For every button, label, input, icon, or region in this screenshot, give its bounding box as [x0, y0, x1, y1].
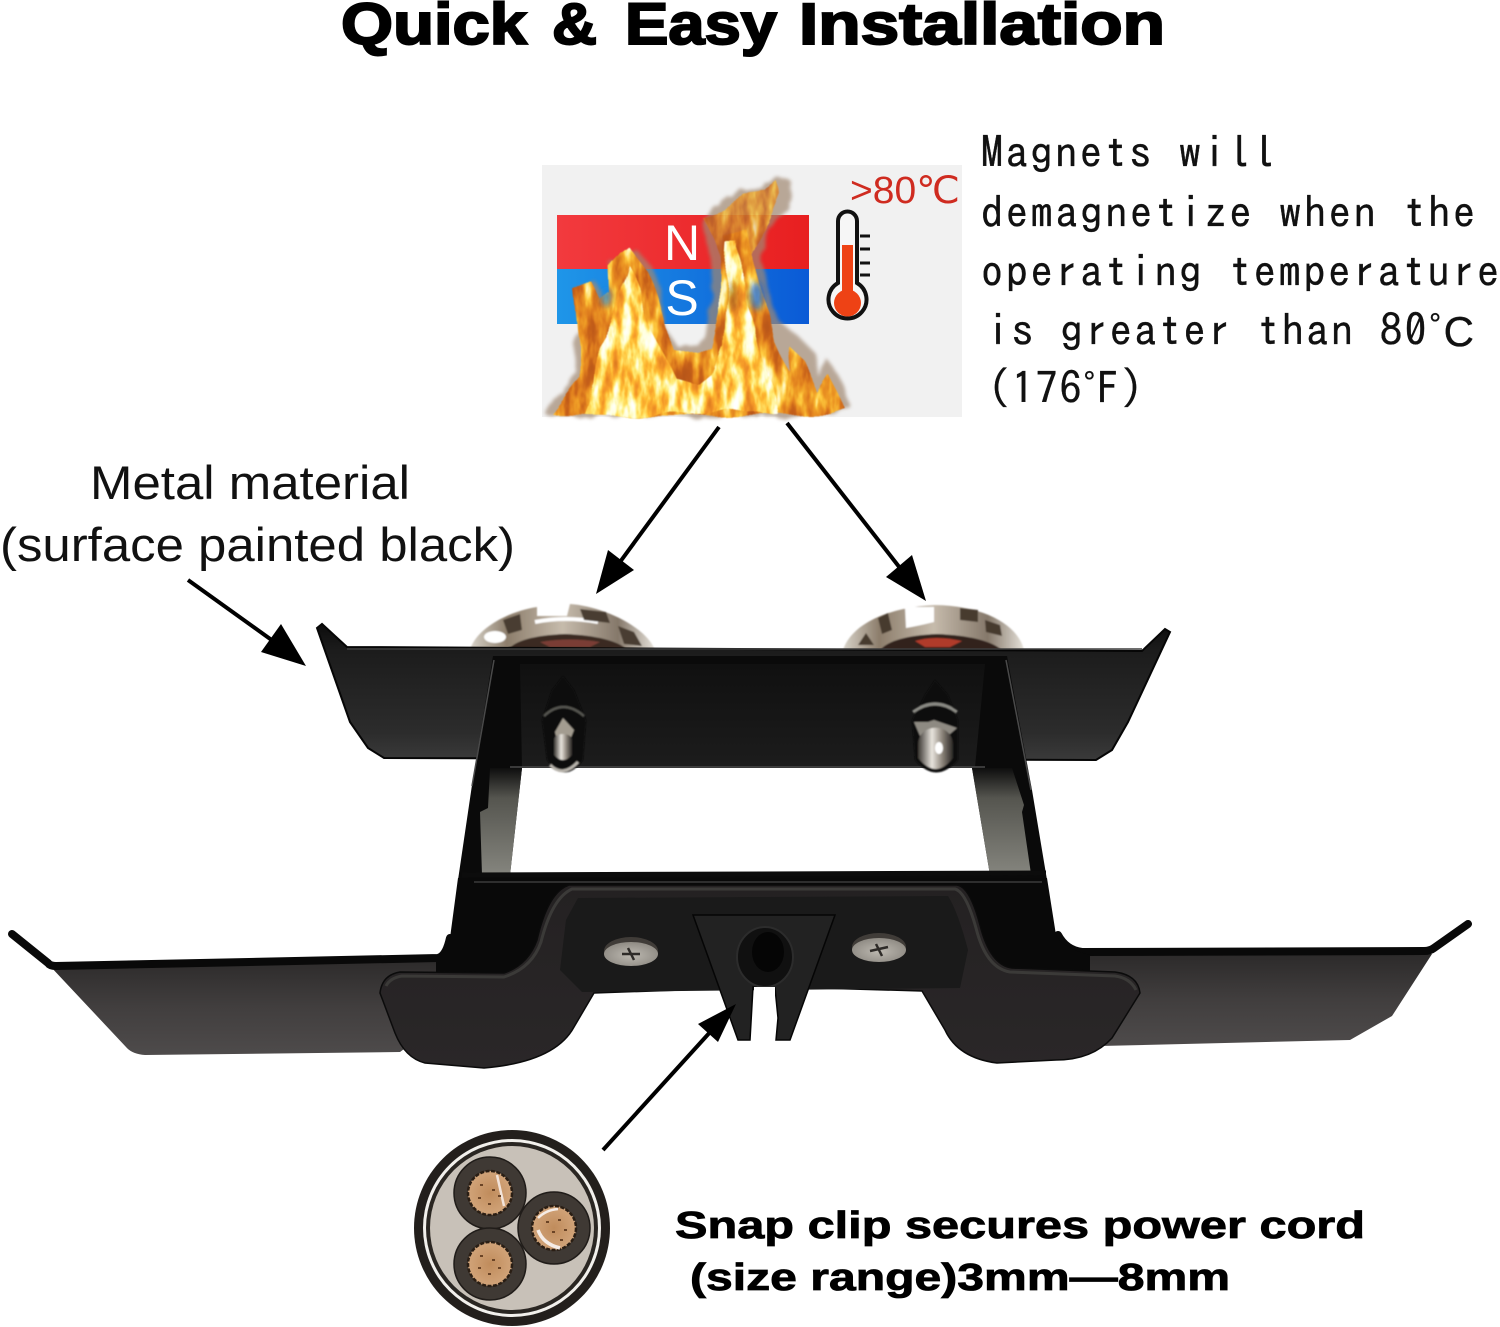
product: bracket with magnets	[12, 604, 1468, 1068]
left wing	[50, 958, 470, 1055]
window opening	[510, 768, 990, 875]
foot inner panel	[560, 896, 968, 992]
text block: metal material: (surface painted black)	[0, 518, 515, 571]
temperature label: >80℃	[850, 170, 960, 212]
plate gloss line	[347, 648, 1142, 650]
text block: snap clip caption: Snap clip secures power cord	[675, 1205, 1365, 1247]
magnet bar: S	[665, 270, 699, 326]
flames	[546, 178, 852, 417]
frame lower bar	[462, 873, 1046, 875]
icon: right screw	[852, 933, 906, 962]
icon: left magnet	[470, 604, 655, 650]
frame side right	[972, 768, 1031, 875]
arrow: snap clip	[603, 1004, 736, 1150]
arrow: heat to left magnet	[596, 427, 719, 594]
text block: demagnetize warning: is greater than 80	[987, 308, 1427, 352]
conductor: top left	[454, 1157, 526, 1229]
title	[341, 0, 1165, 57]
illustration background	[542, 165, 962, 417]
text block: demagnetize warning: F)	[1097, 366, 1143, 410]
panel: magnet overheating illustration	[542, 165, 962, 417]
text block: demagnetize warning: °	[1429, 308, 1441, 341]
text block: snap clip caption: (size range)3mm—8mm	[690, 1257, 1230, 1299]
icon: left screw	[604, 937, 658, 966]
text block: metal material	[0, 456, 515, 571]
magnet showing through flames	[601, 281, 764, 311]
right wing top lip	[1058, 924, 1468, 952]
icon: left bolt	[542, 676, 586, 772]
right wing	[1040, 954, 1432, 1046]
icon: thermometer	[828, 212, 870, 318]
snap clip	[693, 915, 835, 1040]
conductor: right	[518, 1192, 590, 1264]
plastic foot	[380, 885, 1140, 1068]
magnet bar	[557, 215, 809, 326]
icon: right bolt	[912, 680, 958, 772]
foot glossy edge	[386, 889, 1136, 990]
frame side left	[480, 768, 522, 875]
text block: demagnetize warning: °	[1083, 366, 1095, 399]
frame back panel	[520, 664, 985, 767]
icon: power cord cross-section	[414, 1130, 610, 1326]
text block: demagnetize warning: demagnetize when the	[981, 190, 1475, 234]
text block: demagnetize warning: (176	[988, 366, 1082, 410]
arrow: heat to right magnet	[787, 423, 926, 601]
frame highlight lines	[472, 660, 1031, 790]
text block: demagnetize warning	[981, 130, 1499, 410]
conductor: bottom left	[454, 1228, 526, 1300]
magnet bar: N	[664, 215, 700, 271]
text block: demagnetize warning: operating temperature	[981, 249, 1499, 293]
left wing top lip	[12, 934, 450, 966]
frame lower body	[436, 878, 1090, 985]
text block: demagnetize warning: Magnets will	[981, 130, 1275, 174]
frame	[458, 656, 1047, 880]
upper plate	[317, 624, 1170, 760]
arrow: metal material	[188, 580, 306, 666]
icon: right magnet	[843, 605, 1024, 650]
text block: snap clip caption	[675, 1205, 1365, 1299]
text block: metal material: Metal material	[90, 456, 410, 509]
text block: demagnetize warning: C	[1444, 308, 1474, 355]
